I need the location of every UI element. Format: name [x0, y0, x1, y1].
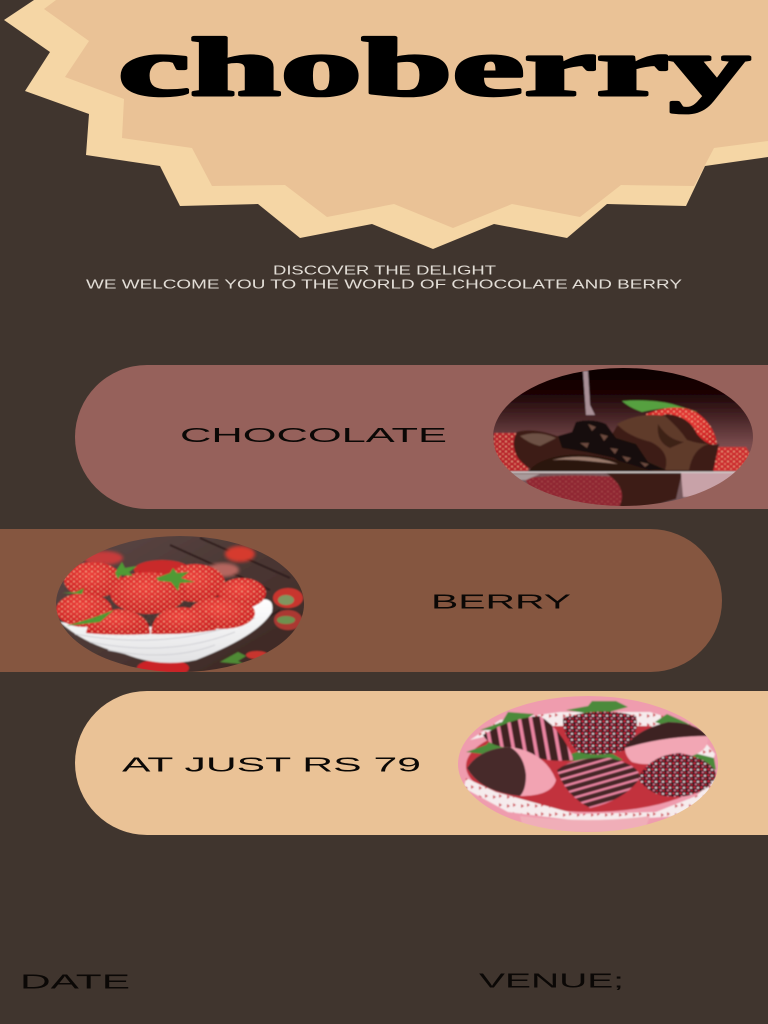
subtitle: DISCOVER THE DELIGHT	[273, 264, 497, 278]
subtitle	[86, 264, 683, 292]
price label: AT JUST RS 79	[122, 754, 421, 776]
panel: chocolate	[75, 360, 768, 515]
panel: price	[75, 690, 768, 840]
chocolate label: CHOCOLATE	[180, 425, 447, 447]
title: choberry	[118, 21, 750, 113]
date label: DATE	[20, 972, 130, 994]
subtitle: WE WELCOME YOU TO THE WORLD OF CHOCOLATE AND BERRY	[86, 278, 683, 292]
photo: chocolate poured over strawberries	[493, 368, 753, 506]
berry label: BERRY	[431, 592, 571, 614]
panel: berry	[0, 529, 722, 680]
photo: bowl of strawberries	[56, 536, 304, 672]
venue label: VENUE;	[479, 970, 624, 992]
photo: chocolate dipped strawberries	[458, 696, 718, 832]
berry band	[0, 529, 722, 672]
chocolate band	[75, 365, 768, 509]
price band	[75, 691, 768, 835]
starburst header	[4, 0, 768, 249]
